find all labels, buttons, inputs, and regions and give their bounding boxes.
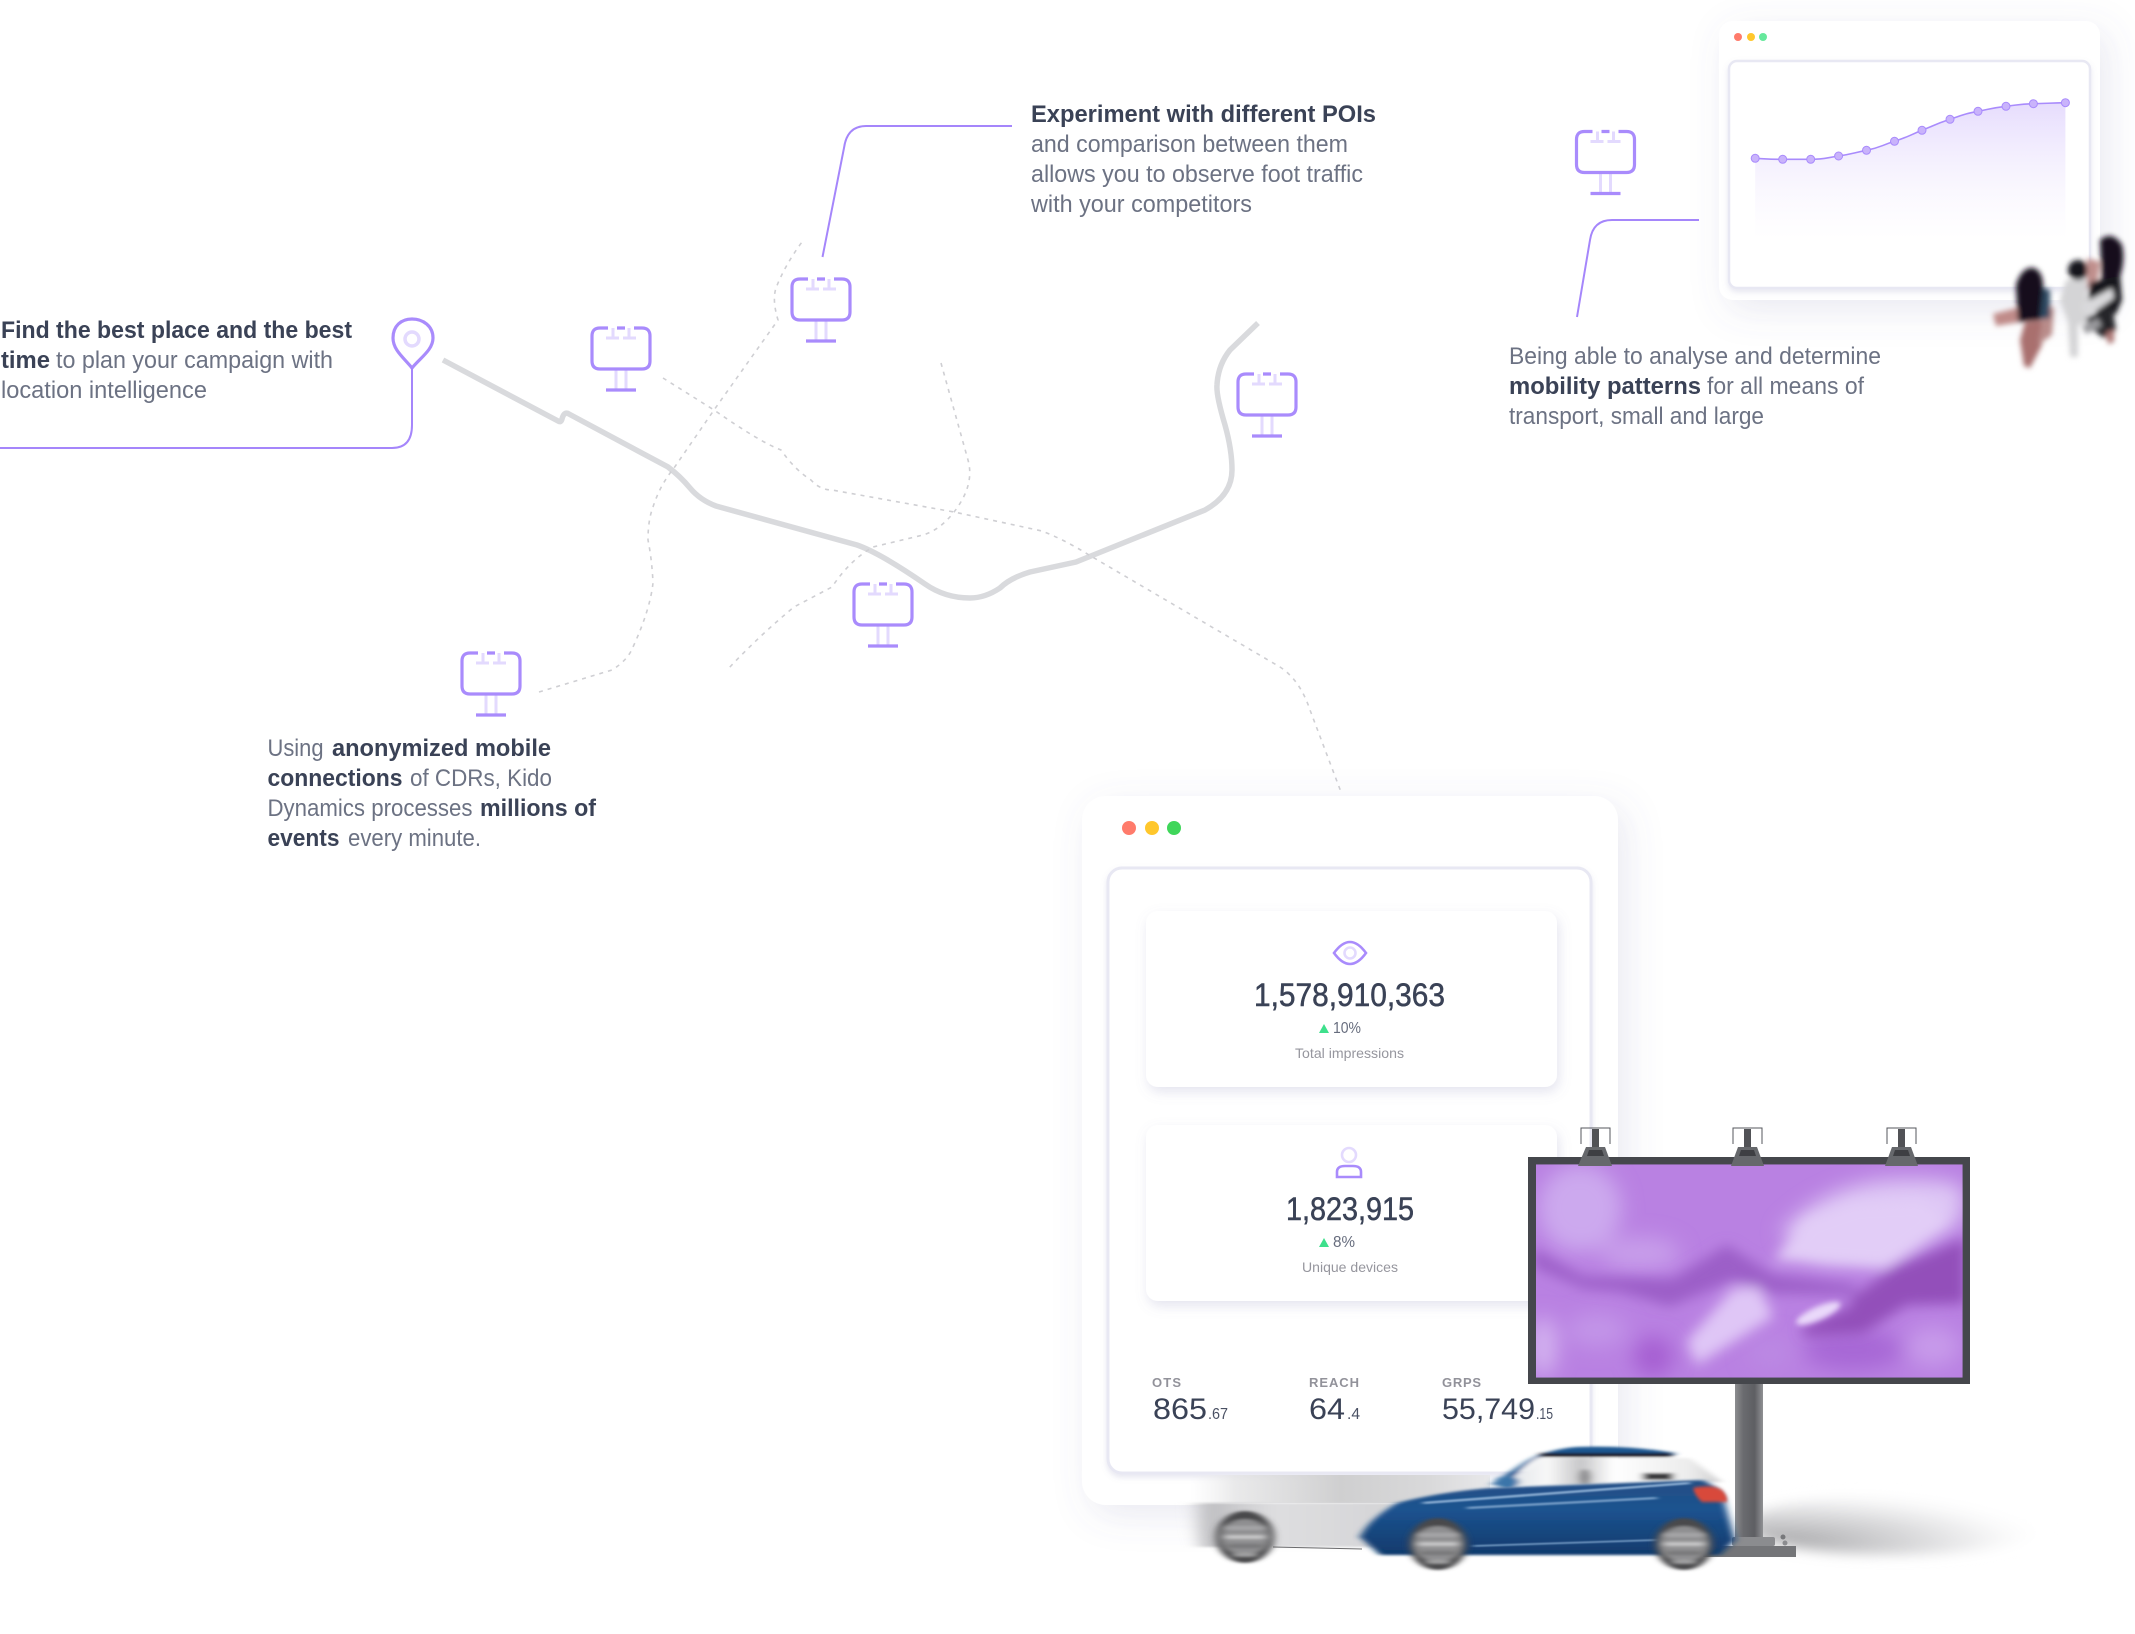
ground shadow under billboard (1745, 1495, 2045, 1555)
change: 10% (1333, 1020, 1361, 1037)
text: POIs: and comparison between them (1031, 131, 1348, 158)
stat: OTS (1152, 1375, 1228, 1426)
text: anonymized connections: of CDRs, Kido (410, 765, 552, 792)
text: POIs (1030, 101, 1376, 218)
text: POIs: Experiment with different POIs (1031, 101, 1376, 128)
stat: GRPS: 55,749 (1442, 1393, 1535, 1426)
connector: POI text to billboard (822, 126, 1012, 257)
text: anonymized connections: connections (268, 765, 402, 792)
post and base (1703, 1384, 1796, 1557)
window dots (1734, 33, 1767, 41)
map: dashed street 3 (729, 363, 970, 668)
text: POIs: with your competitors (1030, 191, 1252, 218)
change: 8% (1333, 1234, 1355, 1251)
text: anonymized connections: millions of (480, 795, 597, 822)
text: anonymized connections (268, 735, 597, 852)
change (1319, 1234, 1355, 1251)
icon: billboard center (854, 584, 912, 646)
label: Unique devices (1302, 1259, 1398, 1275)
car cabin (1490, 1447, 1722, 1488)
stat: OTS: 865 (1153, 1393, 1207, 1426)
map: dashed street 1 (539, 242, 802, 692)
text: best place (1, 317, 352, 404)
car (1190, 1447, 1735, 1570)
icon: billboard POI (792, 279, 850, 341)
icon: billboard top right (1576, 132, 1634, 194)
connector: pin to text (0, 368, 412, 448)
stat: GRPS: .15 (1536, 1406, 1553, 1423)
stat: REACH: 64 (1309, 1393, 1345, 1426)
text: anonymized connections: anonymized mobile (332, 735, 551, 762)
photo: pedestrians seen from above (1993, 236, 2123, 368)
stat: REACH (1309, 1375, 1360, 1426)
screen image (1530, 1164, 1965, 1378)
stat: REACH: .4 (1347, 1406, 1360, 1423)
text: mobility patterns: for all means of (1707, 373, 1864, 400)
panel: metrics dashboard window (1082, 796, 1618, 1505)
inner frame (1108, 868, 1591, 1473)
billboard (1528, 1128, 1970, 1557)
lamp middle (1731, 1128, 1764, 1166)
connector: mobility text to billboard (1577, 220, 1699, 317)
label: Total impressions (1295, 1045, 1404, 1061)
value: 1,578,910,363 (1254, 977, 1445, 1013)
text: anonymized connections: every minute. (348, 825, 481, 852)
icon: billboard near pin (592, 328, 650, 390)
lamp right (1885, 1128, 1918, 1166)
text: best place: time (1, 347, 50, 374)
text: mobility patterns: transport, small and large (1509, 403, 1764, 430)
map: main road (443, 323, 1258, 598)
map: dashed street 2 (663, 378, 1341, 792)
text: mobility patterns: Being able to analyse and determine (1509, 343, 1881, 370)
lamps (1578, 1128, 1918, 1166)
window dots (1122, 821, 1181, 835)
lamp left (1578, 1128, 1612, 1166)
car body (1360, 1480, 1735, 1555)
text: anonymized connections: Dynamics processes (268, 795, 472, 822)
wheels (1409, 1518, 1713, 1570)
card: unique devices (1146, 1125, 1557, 1301)
chart frame (1729, 61, 2090, 288)
icon: billboard right of road (1238, 374, 1296, 436)
text: mobility patterns (1509, 343, 1881, 430)
text: best place: Find the best place and the best (1, 317, 352, 344)
card: total impressions (1146, 911, 1557, 1087)
panel: line chart window (1719, 21, 2100, 300)
text: best place: to plan your campaign with (56, 347, 333, 374)
stat: OTS: .67 (1208, 1406, 1228, 1423)
text: best place: location intelligence (1, 377, 207, 404)
area chart (1751, 99, 2069, 240)
text: anonymized connections: events (268, 825, 340, 852)
text: POIs: allows you to observe foot traffic (1031, 161, 1363, 188)
icon: location pin (393, 319, 433, 368)
icon: person (1337, 1148, 1361, 1177)
text: anonymized connections: Using (268, 735, 324, 762)
change (1319, 1020, 1361, 1037)
stat: GRPS (1442, 1375, 1553, 1426)
text: mobility patterns: mobility patterns (1509, 373, 1701, 400)
frame (1528, 1157, 1970, 1384)
stat: GRPS: GRPS (1442, 1375, 1481, 1390)
icon: eye (1334, 942, 1366, 964)
value: 1,823,915 (1286, 1191, 1414, 1227)
motion trail (1190, 1475, 1490, 1563)
stat: REACH: REACH (1309, 1375, 1359, 1390)
icon: billboard lower left (462, 653, 520, 715)
stat: OTS: OTS (1152, 1375, 1181, 1390)
